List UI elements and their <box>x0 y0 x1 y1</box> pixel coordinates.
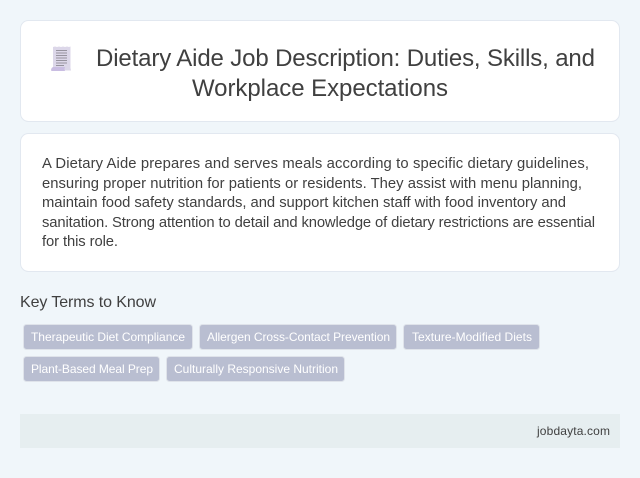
tag: texture-modified diets: Texture-Modified Diets <box>412 330 532 344</box>
description text: maintain food safety standards, and support kitchen staff with food inventory and <box>42 195 566 211</box>
title: Dietary Aide Job Description: Duties, Skills, and <box>96 45 595 72</box>
tag: texture-modified diets <box>404 324 540 350</box>
tag: therapeutic diet compliance: Therapeutic Diet Compliance <box>31 330 185 344</box>
tag: plant-based meal prep <box>24 356 160 382</box>
description text: ensuring proper nutrition for patients or residents. They assist with menu planning, <box>42 176 582 192</box>
icon: receipt scroll <box>51 46 71 71</box>
tag: plant-based meal prep: Plant-Based Meal Prep <box>31 362 153 376</box>
description text <box>42 156 595 250</box>
title <box>96 45 595 102</box>
panel: title card <box>20 20 620 122</box>
description text: A Dietary Aide prepares and serves meals according to specific dietary guidelines, <box>42 156 589 172</box>
heading: key terms: Key Terms to Know <box>20 294 156 311</box>
footer bar <box>20 414 620 448</box>
title: Workplace Expectations <box>192 75 448 102</box>
tag: culturally responsive nutrition <box>166 356 344 382</box>
panel: description card <box>20 134 620 272</box>
description text: sanitation. Strong attention to detail and knowledge of dietary restrictions are essential <box>42 215 595 231</box>
tag: allergen cross-contact prevention <box>200 324 396 350</box>
tag: culturally responsive nutrition: Culturally Responsive Nutrition <box>174 362 338 376</box>
tag: therapeutic diet compliance <box>24 324 192 350</box>
footer source: jobdayta.com <box>536 424 610 438</box>
tag: allergen cross-contact prevention: Allergen Cross-Contact Prevention <box>207 330 390 344</box>
tag group <box>24 324 540 382</box>
description text: for this role. <box>42 234 118 250</box>
